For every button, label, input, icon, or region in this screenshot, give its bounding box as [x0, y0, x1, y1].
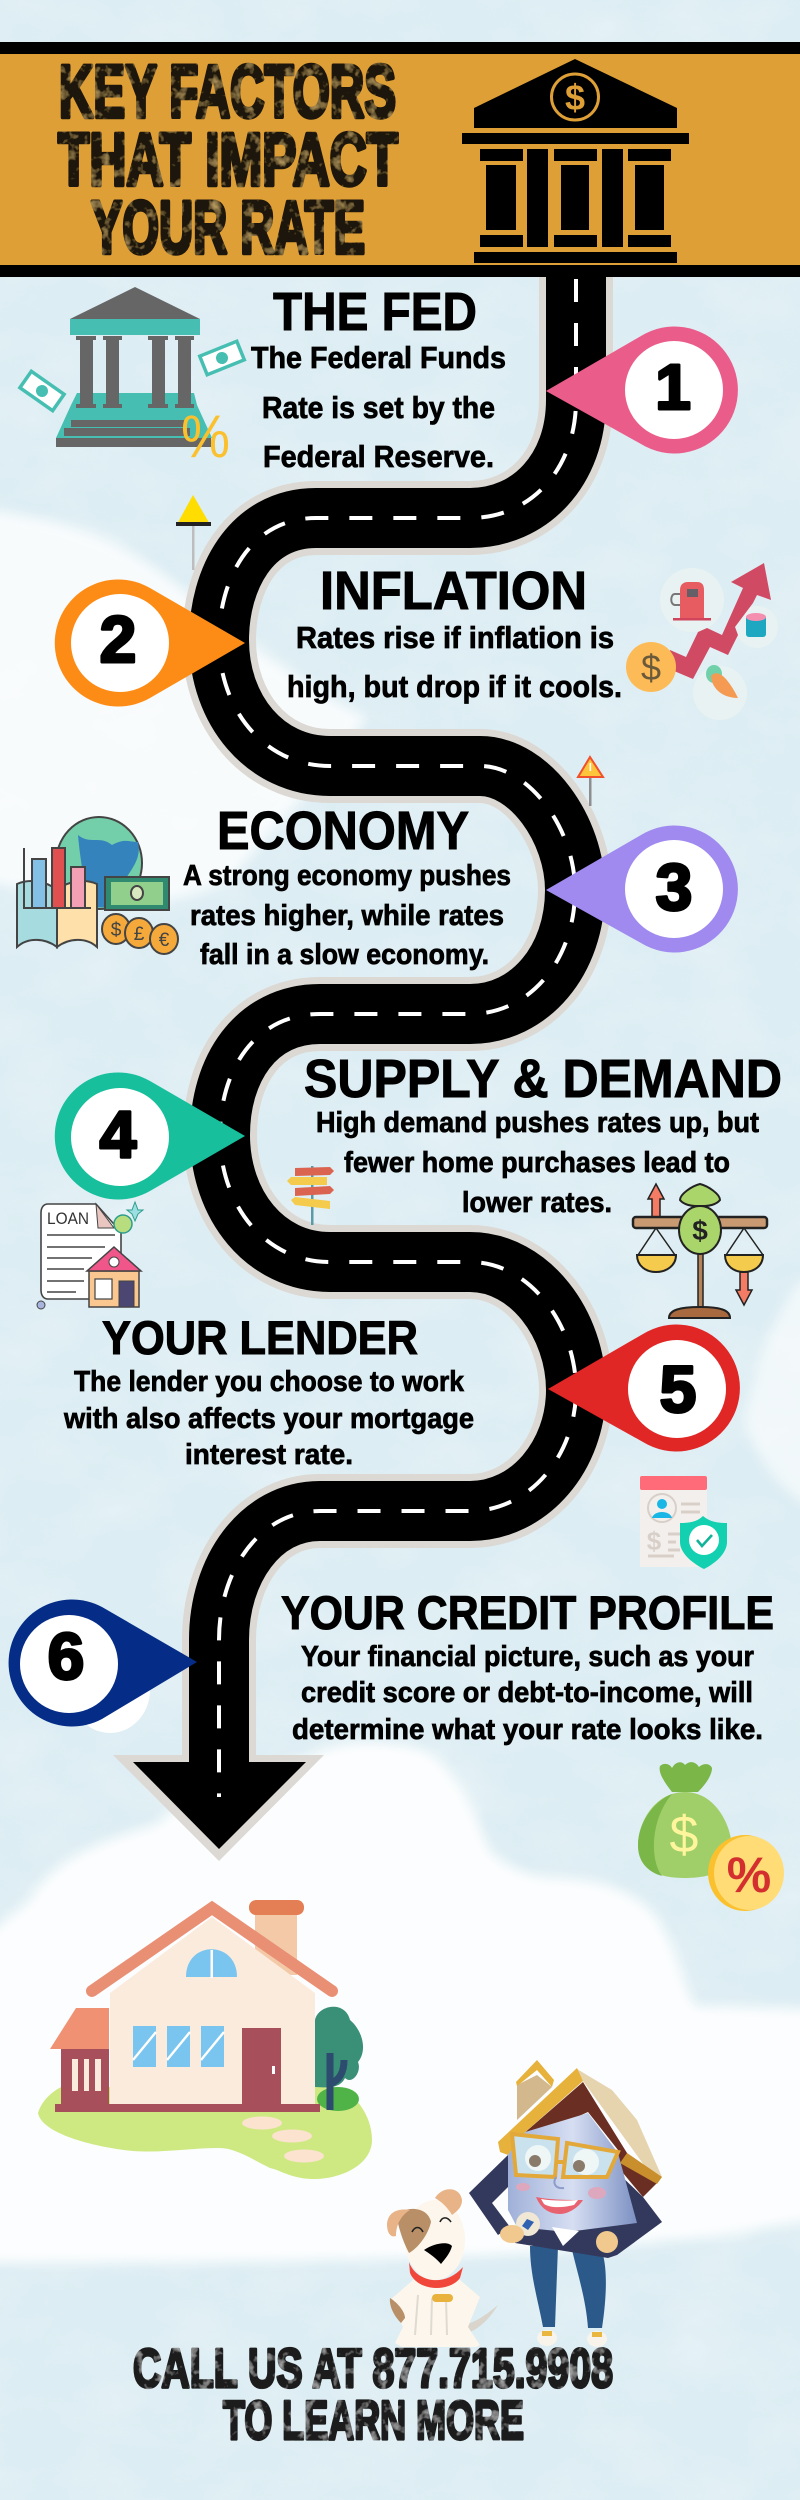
title: KEY FACTORS	[59, 50, 396, 133]
icon: money bag with percent coin: $	[670, 1806, 699, 1864]
text: the fed: The Federal Funds	[251, 340, 506, 375]
text: your lender	[63, 1311, 474, 1471]
marker 5	[548, 1324, 740, 1452]
text: economy: ECONOMY	[217, 801, 469, 861]
marker 4: 4	[100, 1097, 137, 1171]
marker 1	[546, 326, 738, 453]
marker 2: 2	[100, 602, 136, 676]
icon: money bag with percent coin: %	[727, 1847, 771, 1903]
text: inflation: Rates rise if inflation is	[296, 620, 614, 655]
text: economy	[183, 801, 511, 971]
text: inflation: high, but drop if it cools.	[287, 669, 622, 704]
call to action: CALL US AT 877.715.9908	[133, 2337, 613, 2399]
text: the fed: Federal Reserve.	[263, 439, 494, 474]
marker 6: 6	[48, 1619, 84, 1693]
call to action: TO LEARN MORE	[223, 2389, 524, 2451]
icon: scale with money bag	[633, 1184, 767, 1318]
text: the fed: THE FED	[273, 282, 477, 342]
road with winding path and arrow	[113, 277, 576, 1861]
marker 5: 5	[660, 1352, 696, 1426]
text: inflation: INFLATION	[320, 561, 587, 621]
marker 1: 1	[655, 351, 691, 423]
icon: loan document with house: LOAN	[47, 1209, 89, 1228]
icon: bank building: $	[565, 77, 585, 118]
text: the fed	[251, 282, 506, 474]
marker 4	[55, 1072, 245, 1200]
text: supply and demand	[304, 1049, 782, 1219]
title: YOUR RATE	[91, 186, 365, 269]
text: economy: A strong economy pushes	[183, 860, 511, 892]
marker 6	[9, 1599, 197, 1733]
call to action	[133, 2337, 613, 2451]
text: economy: rates higher, while rates	[190, 900, 504, 932]
title: THAT IMPACT	[58, 118, 398, 201]
icon: credit report and shield	[640, 1476, 727, 1569]
illustration: house mascot character	[469, 2060, 662, 2347]
icon: orange warning sign	[578, 757, 603, 806]
header band	[0, 42, 800, 277]
text: your lender: interest rate.	[185, 1439, 353, 1471]
icon: scale with money bag: $	[692, 1215, 708, 1246]
marker 2	[55, 580, 245, 706]
illustration: dog with collar	[387, 2189, 498, 2347]
icon: economy globe, book, bars, money and coins	[17, 817, 178, 954]
marker 3	[546, 826, 738, 953]
icon: federal reserve building	[20, 287, 244, 470]
text: the fed: Rate is set by the	[262, 390, 495, 425]
icon: economy globe, book, bars, money and coins: $	[111, 920, 122, 941]
icon: federal reserve building: %	[181, 403, 230, 470]
marker 3: 3	[656, 850, 692, 924]
icon: money bag with percent coin	[638, 1762, 784, 1911]
icon: economy globe, book, bars, money and coins: £	[134, 924, 145, 945]
text: inflation	[287, 561, 622, 704]
icon: signpost	[287, 1166, 334, 1225]
text: your lender: The lender you choose to work	[74, 1366, 465, 1398]
text: your lender: with also affects your mortgage	[63, 1403, 474, 1435]
text: supply and demand: High demand pushes rates up, but	[316, 1107, 759, 1139]
icon: economy globe, book, bars, money and coins: €	[159, 930, 170, 951]
icon: bank building	[462, 59, 689, 263]
text: your lender: YOUR LENDER	[102, 1311, 418, 1364]
icon: inflation chart with coin, pump and carrot	[626, 563, 778, 720]
icon: credit report and shield: $	[647, 1526, 662, 1556]
text: supply and demand: lower rates.	[462, 1187, 612, 1219]
icon: loan document with house	[37, 1202, 143, 1309]
text: your credit profile: Your financial picture, such as your	[301, 1641, 754, 1673]
text: economy: fall in a slow economy.	[200, 939, 489, 971]
text: supply and demand: fewer home purchases lead to	[344, 1147, 730, 1179]
icon: yellow warning sign	[176, 495, 211, 570]
icon: inflation chart with coin, pump and carrot: $	[641, 647, 661, 688]
text: your credit profile: determine what your rate looks like.	[292, 1714, 763, 1746]
title	[58, 50, 398, 269]
text: your credit profile	[281, 1586, 774, 1746]
illustration: dream house on lawn	[38, 1900, 372, 2179]
text: your credit profile: credit score or debt-to-income, will	[301, 1677, 753, 1709]
